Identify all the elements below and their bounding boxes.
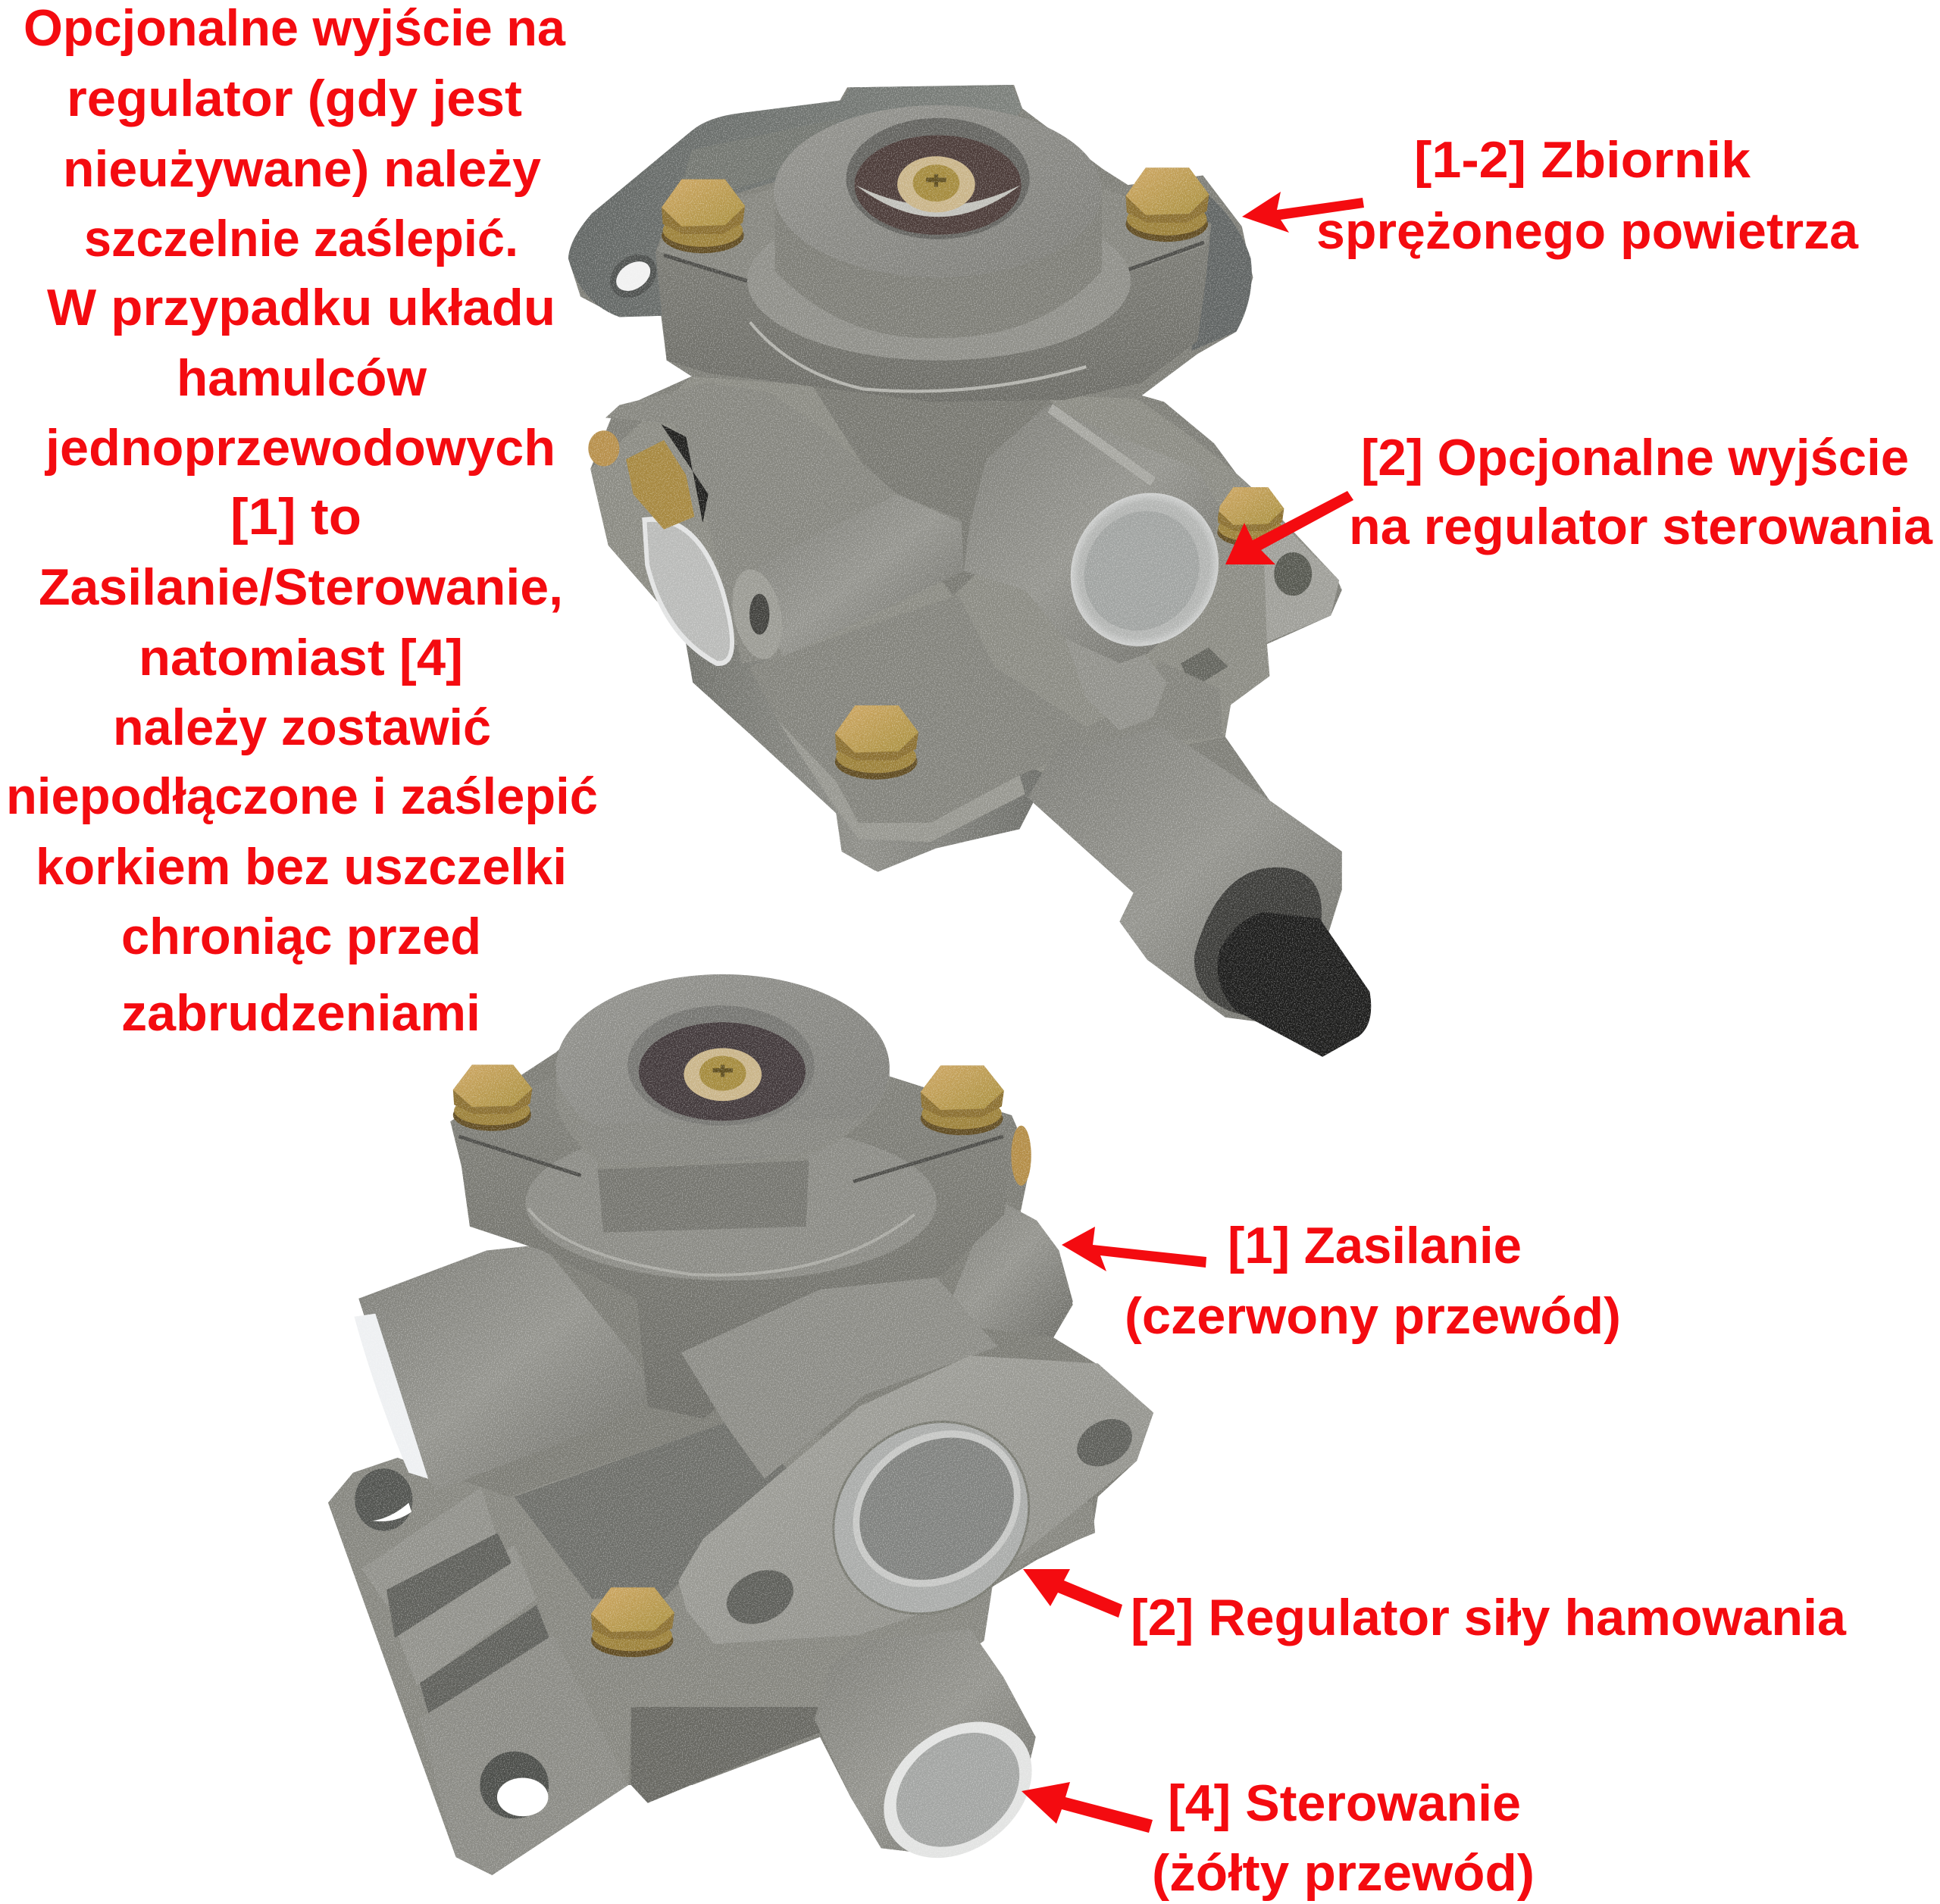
left instruction text: hamulców xyxy=(177,349,427,407)
label: [1] supply: [1] Zasilanie xyxy=(1228,1217,1522,1274)
left instruction text: należy zostawić xyxy=(113,699,491,756)
left instruction text: szczelnie zaślepić. xyxy=(84,210,518,267)
left instruction text: chroniąc przed xyxy=(121,908,481,965)
silhouette backing xyxy=(328,974,1153,1875)
left instruction text: [1] to xyxy=(230,488,361,546)
lower right pipe xyxy=(1028,727,1371,1057)
label: [4] control xyxy=(1152,1774,1535,1902)
silhouette backing xyxy=(568,85,1342,1024)
label: [4] control: [4] Sterowanie xyxy=(1168,1774,1521,1832)
arrow to [1] supply port xyxy=(1062,1227,1206,1271)
valve photo: top view with labelled ports xyxy=(568,85,1371,1057)
label: [1-2] air tank: sprężonego powietrza xyxy=(1316,202,1859,260)
lid step ring xyxy=(747,201,1131,361)
right side port xyxy=(942,1196,1073,1337)
label: [1-2] air tank xyxy=(1316,131,1859,260)
base plate rear xyxy=(590,377,1339,781)
label: [1] supply xyxy=(1125,1217,1621,1345)
left instruction text: Opcjonalne wyjście na xyxy=(23,0,566,57)
left instruction text: korkiem bez uszczelki xyxy=(36,838,567,896)
base plate corner with hole xyxy=(1181,494,1339,689)
right rear port xyxy=(1192,182,1252,351)
left instruction text: W przypadku układu xyxy=(47,279,555,336)
arrow to [4] control port xyxy=(1022,1782,1153,1833)
left instruction text: jednoprzewodowych xyxy=(44,419,555,477)
front port with plastic cap xyxy=(964,405,1238,670)
lid step ring xyxy=(525,1124,937,1280)
left instruction text: zabrudzeniami xyxy=(121,984,480,1042)
arrow to [2] optional outlet xyxy=(1225,491,1353,564)
label: [1-2] air tank: [1-2] Zbiornik xyxy=(1414,131,1751,189)
round cap xyxy=(774,105,1102,338)
central column xyxy=(809,380,1097,596)
valve photo: lower view with labelled ports xyxy=(328,974,1153,1886)
label: [2] optional regulator outlet: [2] Opcjonalne wyjście xyxy=(1361,429,1909,486)
left instruction text: natomiast [4] xyxy=(139,629,463,686)
bolts xyxy=(453,1065,1031,1657)
boss under front port xyxy=(1064,635,1167,730)
lower flange plate xyxy=(749,595,1222,823)
label: [2] brake force regulator: [2] Regulator siły hamowania xyxy=(1131,1589,1847,1646)
left instruction text: regulator (gdy jest xyxy=(67,70,522,127)
arrow to [2] regulator port xyxy=(1023,1569,1122,1618)
lid and body xyxy=(450,1077,1012,1418)
label: [1] supply: (czerwony przewód) xyxy=(1125,1287,1621,1345)
bottom port with plastic cap xyxy=(815,1629,1055,1886)
left instruction text: niepodłączone i zaślepić xyxy=(6,768,598,825)
rear mounting flange xyxy=(568,85,1022,317)
mid block xyxy=(681,1277,998,1479)
left port block xyxy=(605,383,964,665)
lid plate xyxy=(657,188,1209,302)
lid body xyxy=(656,182,1211,402)
round cap with tab xyxy=(556,974,890,1233)
arrow to [1-2] port xyxy=(1242,192,1364,233)
left instruction text: nieużywane) należy xyxy=(63,140,541,198)
left pipe with white plug xyxy=(354,1245,659,1491)
label: [2] optional regulator outlet xyxy=(1349,429,1933,555)
lower casing xyxy=(684,628,1047,872)
plate front edge xyxy=(778,721,1025,842)
front flange with plastic cap xyxy=(678,1355,1153,1648)
left instruction text: Zasilanie/Sterowanie, xyxy=(39,558,563,616)
label: [2] optional regulator outlet: na regulator sterowania xyxy=(1349,498,1933,555)
label: [4] control: (żółty przewód) xyxy=(1152,1844,1535,1902)
left instruction text xyxy=(6,0,598,1042)
bolts xyxy=(588,167,1284,780)
base with mounting plate xyxy=(328,1418,1095,1875)
